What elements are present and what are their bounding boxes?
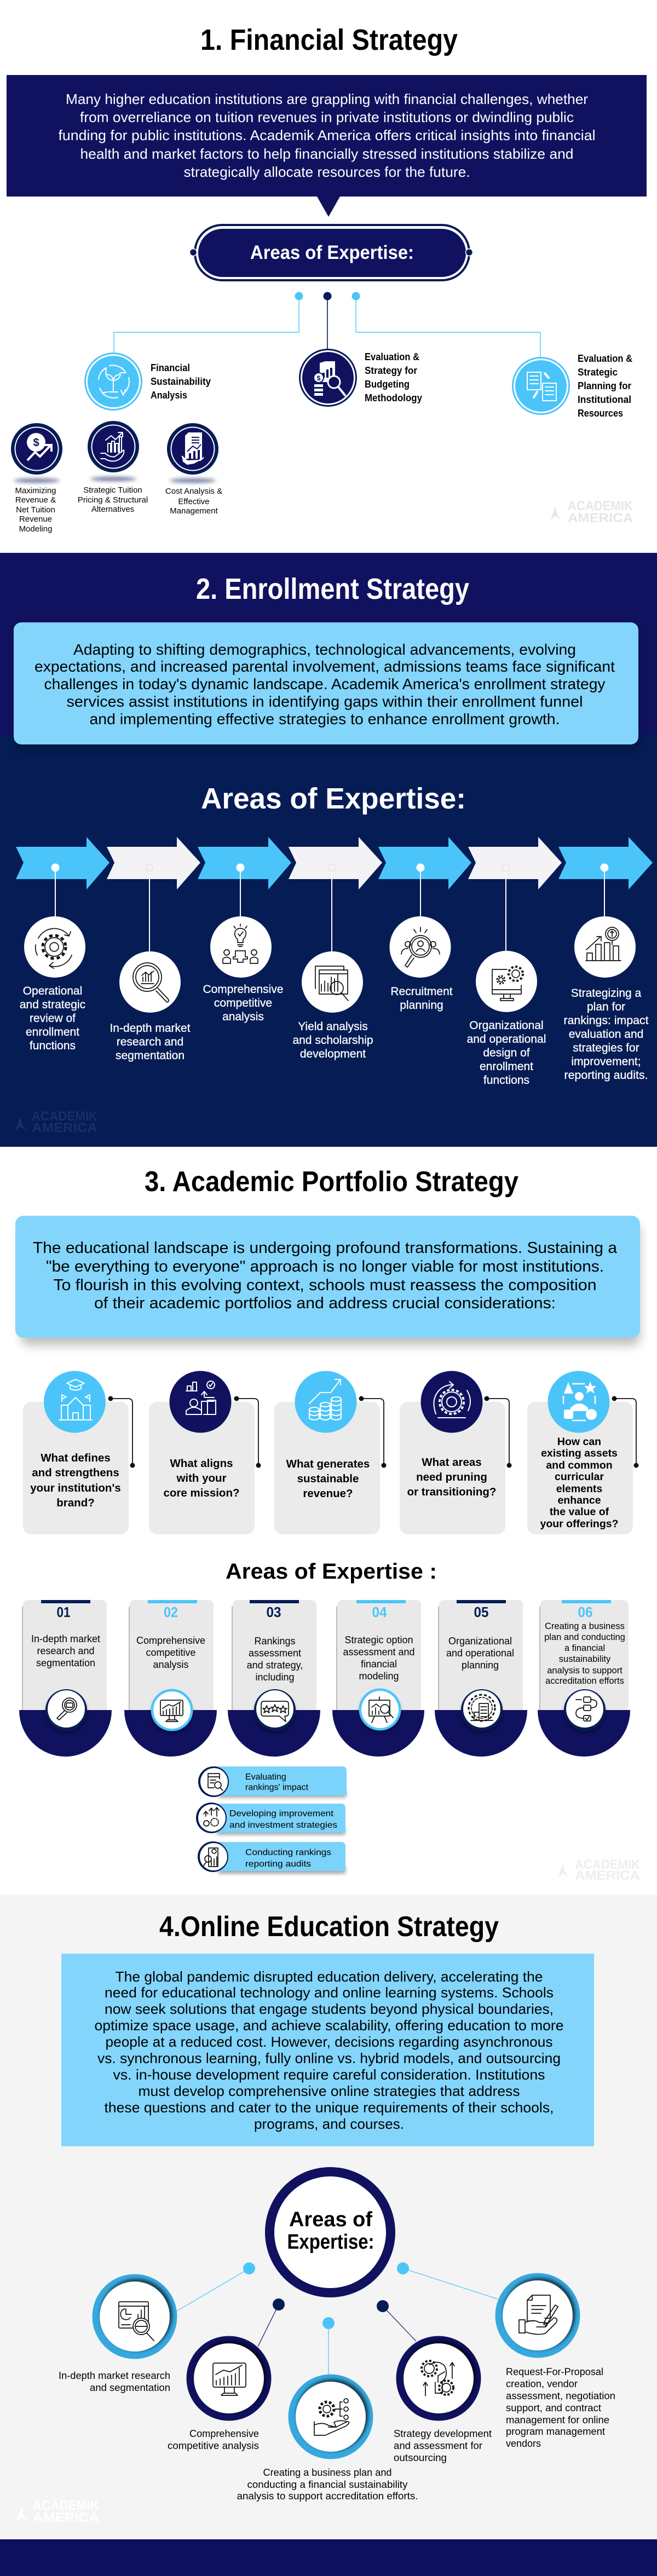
label: financial sustainability analysis: Analysis	[151, 389, 187, 401]
spoke: request for proposal	[495, 2273, 615, 2449]
step 6: organizational design	[467, 951, 546, 1087]
label: institutional resources: Institutional	[578, 394, 631, 405]
step 3: competitive analysis	[203, 916, 284, 1023]
step 4: yield analysis: and scholarship	[292, 1034, 373, 1047]
step 7: rankings plan: plan for	[587, 1001, 625, 1013]
card: assets and curricular elements: the value of	[550, 1506, 609, 1518]
label: budgeting methodology: Evaluation &	[365, 351, 419, 362]
heading: areas of expertise (enrollment): Areas of Expertise:	[201, 782, 466, 815]
spoke: request for proposal: Request-For-Proposal	[506, 2366, 603, 2377]
watermark: top: AMERICA	[568, 511, 633, 525]
column 04: strategic option assessment: 04	[372, 1604, 387, 1620]
title: 4.Online Education Strategy: 4.Online Education Strategy	[159, 1911, 499, 1943]
panel: enrollment intro: Adapting to shifting demographics, technological advancements, evolving	[73, 641, 576, 658]
label: budgeting methodology: Budgeting	[365, 378, 410, 390]
spoke: market research: In-depth market research	[59, 2370, 170, 2381]
step 5: recruitment planning: planning	[400, 999, 443, 1012]
label: financial sustainability analysis: Financial	[151, 362, 190, 373]
card: pruning or transitioning: or transitioning?	[407, 1486, 496, 1498]
column 03: rankings assessment: Rankings	[254, 1636, 296, 1647]
spoke: market research	[59, 2274, 177, 2393]
column 01: market research: In-depth market	[31, 1633, 100, 1644]
icon: maximizing revenue	[11, 423, 62, 483]
watermark: enrollment: AMERICA	[32, 1120, 97, 1135]
card: sustainable revenue: revenue?	[303, 1487, 353, 1500]
label: institutional resources: Resources	[578, 407, 623, 419]
icon: cost analysis	[167, 423, 218, 483]
label: maximizing revenue: Modeling	[19, 524, 52, 534]
column 01: market research: segmentation	[36, 1657, 95, 1668]
step 3: competitive analysis: Comprehensive	[203, 983, 284, 996]
column 03: rankings assessment	[228, 1600, 320, 1757]
icon: maximizing revenue: $	[33, 437, 39, 449]
column 05: organizational planning: and operational	[446, 1648, 514, 1659]
footer band	[0, 2539, 657, 2576]
hub: areas of expertise circle	[265, 2167, 395, 2297]
spoke: request for proposal: assessment, negotiation	[506, 2390, 615, 2401]
areas of expertise pill: Areas of Expertise:	[250, 242, 414, 263]
column 05: organizational planning: Organizational	[448, 1636, 512, 1647]
watermark: online: ACADEMIK	[33, 2498, 100, 2513]
section background: online education strategy	[0, 1895, 657, 2539]
card: institution's brand: brand?	[56, 1497, 95, 1509]
spoke: market research: and segmentation	[90, 2382, 170, 2393]
panel: enrollment intro: services assist institutions in identifying gaps within their enrollment funnel	[67, 693, 583, 710]
label: cost analysis: Effective	[178, 497, 210, 506]
spoke: business plan: conducting a financial sustainability	[247, 2479, 408, 2490]
panel: academic portfolio intro: of their academic portfolios and address crucial considerations:	[94, 1295, 556, 1312]
column 06: business plan	[538, 1600, 630, 1757]
step 4: yield analysis	[292, 951, 373, 1060]
step 2: market research: research and	[117, 1036, 183, 1048]
panel: financial strategy intro: funding for public institutions. Academik America offers critical insights into financial	[58, 127, 596, 143]
label: maximizing revenue: Net Tuition	[16, 505, 55, 515]
panel: online education intro: these questions and cater to the unique requirements of their schools,	[104, 2099, 554, 2116]
step 1: operational review: functions	[30, 1039, 76, 1052]
card: institution's brand	[23, 1371, 135, 1534]
panel: online education intro: need for educational technology and online learning systems. Schools	[105, 1984, 554, 2001]
spoke: business plan: analysis to support accreditation efforts.	[237, 2490, 418, 2502]
panel: financial strategy intro: from overreliance on tuition revenues in private institutions or dwindling public	[80, 109, 574, 125]
watermark: online: AMERICA	[33, 2510, 99, 2525]
step 4: yield analysis: Yield analysis	[298, 1020, 368, 1033]
panel: financial strategy intro: strategically allocate resources for the future.	[184, 164, 470, 180]
step 6: organizational design: Organizational	[469, 1019, 544, 1032]
card: assets and curricular elements: existing assets	[541, 1447, 618, 1459]
spoke: request for proposal: creation, vendor	[506, 2378, 578, 2389]
step 7: rankings plan	[564, 916, 649, 1082]
sub-item: conducting rankings reporting audits: Conducting rankings	[245, 1848, 331, 1857]
card: assets and curricular elements: elements	[556, 1483, 602, 1495]
spoke: strategy development: outsourcing	[394, 2452, 447, 2463]
sub-item: evaluating rankings impact: rankings' impact	[245, 1783, 309, 1792]
areas of expertise pill	[189, 225, 473, 280]
panel: academic portfolio intro: The educational landscape is undergoing profound transformations. Sustaining a	[33, 1239, 618, 1257]
column 06: business plan: analysis to support	[547, 1666, 623, 1676]
step 6: organizational design: design of	[483, 1047, 530, 1059]
sub-item: conducting rankings reporting audits	[198, 1841, 345, 1874]
spoke: strategy development	[394, 2336, 492, 2463]
section background: enrollment strategy	[0, 553, 657, 1147]
column 06: business plan: Creating a business	[545, 1621, 625, 1631]
watermark: portfolio	[558, 1857, 641, 1883]
column 01: market research	[19, 1600, 112, 1757]
watermark: enrollment	[15, 1109, 98, 1135]
sub-item: developing improvement strategies: Developing improvement	[229, 1809, 334, 1818]
card: core mission: What aligns	[170, 1457, 233, 1470]
column 06: business plan: plan and conducting	[544, 1632, 625, 1642]
hub: areas of expertise circle: Expertise:	[287, 2231, 374, 2254]
column 03: rankings assessment: assessment	[249, 1648, 301, 1659]
step 5: recruitment planning: Recruitment	[390, 985, 453, 998]
card: core mission	[149, 1371, 261, 1534]
card: pruning or transitioning: What areas	[422, 1456, 482, 1469]
sub-item: developing improvement strategies	[196, 1803, 345, 1835]
icon: financial sustainability	[84, 353, 142, 411]
step 7: rankings plan: evaluation and	[569, 1028, 643, 1041]
column 03: rankings assessment: and strategy,	[247, 1660, 303, 1671]
column 05: organizational planning	[435, 1600, 527, 1757]
panel: academic portfolio intro: To flourish in this evolving context, schools must reassess the composition	[54, 1277, 597, 1294]
label: maximizing revenue: Revenue &	[15, 495, 56, 505]
watermark: top	[551, 499, 633, 525]
label: maximizing revenue	[15, 486, 56, 534]
panel: online education intro: must develop comprehensive online strategies that address	[138, 2083, 520, 2099]
watermark: top: ACADEMIK	[568, 499, 633, 513]
step 1: operational review: and strategic	[20, 998, 85, 1011]
panel: enrollment intro: challenges in today's dynamic landscape. Academik America's enrollment strategy	[44, 675, 606, 692]
column 06: business plan: sustainability	[559, 1654, 611, 1664]
connectors: pill to three areas	[114, 292, 540, 357]
column 04: strategic option assessment	[332, 1600, 424, 1757]
panel: enrollment intro: expectations, and increased parental involvement, admissions teams face significant	[34, 658, 615, 675]
connectors: hub to spokes	[177, 2262, 498, 2375]
step 6: organizational design: enrollment	[480, 1060, 533, 1073]
panel: online education intro: programs, and courses.	[254, 2116, 404, 2132]
heading: areas of expertise (portfolio): Areas of Expertise :	[226, 1560, 437, 1584]
sub-item: developing improvement strategies: and investment strategies	[229, 1821, 337, 1830]
spoke: competitive analysis: competitive analysis	[168, 2440, 259, 2451]
column 03: rankings assessment: including	[255, 1672, 295, 1683]
card: sustainable revenue	[274, 1371, 387, 1534]
panel: academic portfolio intro	[15, 1216, 640, 1345]
column 01: market research: 01	[57, 1604, 70, 1620]
label: institutional resources	[578, 353, 632, 419]
label: budgeting methodology: Strategy for	[365, 365, 417, 376]
spoke: business plan: Creating a business plan and	[263, 2467, 392, 2478]
label: maximizing revenue: Revenue	[19, 515, 52, 524]
watermark: portfolio: ACADEMIK	[575, 1857, 641, 1872]
card: assets and curricular elements: How can	[557, 1436, 601, 1448]
label: institutional resources: Strategic	[578, 366, 618, 378]
label: cost analysis: Management	[170, 506, 218, 516]
panel: online education intro: vs. in-house development require careful consideration. Institutions	[113, 2066, 545, 2083]
step 6: organizational design: functions	[483, 1074, 529, 1087]
label: cost analysis: Cost Analysis &	[165, 487, 222, 496]
column 02: competitive analysis: 02	[164, 1604, 178, 1620]
card: core mission: core mission?	[163, 1487, 240, 1499]
card: institution's brand: What defines	[41, 1452, 111, 1464]
sub-item: evaluating rankings impact	[198, 1766, 347, 1798]
label: financial sustainability analysis	[151, 362, 211, 401]
label: strategic tuition pricing: Alternatives	[91, 505, 134, 514]
step 3: competitive analysis: analysis	[222, 1010, 264, 1023]
card: assets and curricular elements: and common	[546, 1459, 613, 1471]
panel: academic portfolio intro: "be everything to everyone" approach is no longer viable for most institutions.	[46, 1258, 604, 1275]
step 4: yield analysis: development	[300, 1048, 366, 1060]
label: institutional resources: Evaluation &	[578, 353, 632, 364]
section background: financial strategy	[0, 0, 657, 553]
panel: online education intro: The global pandemic disrupted education delivery, accelerating the	[115, 1968, 543, 1985]
column 06: business plan: 06	[578, 1604, 592, 1620]
column 02: competitive analysis: competitive	[146, 1647, 196, 1658]
step 7: rankings plan: improvement;	[571, 1055, 641, 1068]
column 01: market research: research and	[37, 1645, 95, 1656]
step 1: operational review: review of	[30, 1012, 76, 1025]
step 7: rankings plan: Strategizing a	[571, 987, 642, 1000]
column 04: strategic option assessment: assessment and	[343, 1647, 415, 1657]
card: core mission: with your	[176, 1472, 227, 1485]
card: sustainable revenue: sustainable	[297, 1472, 359, 1485]
hub: areas of expertise circle: Areas of	[289, 2208, 372, 2231]
spoke: request for proposal: management for online	[506, 2414, 609, 2425]
column 05: organizational planning: 05	[474, 1604, 488, 1620]
panel: enrollment intro	[14, 622, 638, 751]
card: assets and curricular elements: your offerings?	[540, 1518, 619, 1530]
column 04: strategic option assessment: financial	[361, 1659, 397, 1670]
sub-item: evaluating rankings impact: Evaluating	[245, 1772, 286, 1782]
chevron arrows row	[16, 837, 653, 890]
column 02: competitive analysis: analysis	[153, 1659, 189, 1670]
column 05: organizational planning: planning	[462, 1660, 499, 1671]
card: institution's brand: your institution's	[30, 1482, 121, 1494]
title: 3. Academic Portfolio Strategy: 3. Academic Portfolio Strategy	[145, 1166, 518, 1198]
card: sustainable revenue: What generates	[286, 1458, 370, 1470]
step 2: market research: segmentation	[116, 1049, 185, 1062]
spoke: request for proposal: vendors	[506, 2438, 541, 2449]
spoke: request for proposal: program management	[506, 2425, 605, 2437]
column 04: strategic option assessment: Strategic option	[344, 1634, 413, 1645]
column 04: strategic option assessment: modeling	[359, 1671, 399, 1682]
column 06: business plan: a financial	[564, 1643, 605, 1653]
panel: financial strategy intro: Many higher education institutions are grappling with financial challenges, whether	[66, 91, 588, 107]
spoke: request for proposal: support, and contract	[506, 2402, 601, 2413]
label: strategic tuition pricing: Strategic Tuition	[83, 486, 142, 495]
step 2: market research	[110, 951, 191, 1062]
column 06: business plan: accreditation efforts	[545, 1676, 624, 1686]
step 1: operational review	[20, 916, 85, 1052]
spoke: business plan	[237, 2375, 418, 2502]
card: pruning or transitioning: need pruning	[416, 1471, 487, 1483]
column 02: competitive analysis: Comprehensive	[136, 1635, 205, 1646]
watermark: online	[16, 2498, 100, 2525]
step 7: rankings plan: rankings: impact	[564, 1014, 649, 1027]
label: strategic tuition pricing: Pricing & Structural	[78, 495, 148, 505]
spoke: strategy development: Strategy development	[394, 2428, 492, 2439]
sub-item: conducting rankings reporting audits: reporting audits	[245, 1859, 311, 1869]
icon: budgeting methodology: $	[317, 374, 321, 382]
card: institution's brand: and strengthens	[32, 1466, 119, 1479]
label: financial sustainability analysis: Sustainability	[151, 376, 211, 387]
label: budgeting methodology	[365, 351, 423, 403]
watermark: portfolio: AMERICA	[575, 1868, 640, 1883]
step 7: rankings plan: strategies for	[573, 1042, 639, 1054]
icon: strategic tuition pricing	[88, 421, 139, 481]
card: assets and curricular elements: enhance	[557, 1494, 601, 1506]
connector lines from arrows to icons	[51, 864, 608, 955]
panel: enrollment intro: and implementing effective strategies to enhance enrollment growth.	[90, 711, 560, 727]
title: 2. Enrollment Strategy: 2. Enrollment Strategy	[196, 573, 469, 605]
spoke: strategy development: and assessment for	[394, 2440, 482, 2451]
label: cost analysis	[165, 487, 222, 516]
panel: online education intro: vs. synchronous learning, fully online vs. hybrid models, and outsourcing	[97, 2050, 561, 2066]
panel: online education intro: now seek solutions that engage students beyond physical boundaries,	[105, 2001, 554, 2017]
icon: institutional resources planning	[512, 357, 570, 415]
title: 1. Financial Strategy: 1. Financial Strategy	[200, 24, 458, 56]
step 6: organizational design: and operational	[467, 1033, 546, 1046]
label: strategic tuition pricing	[78, 486, 148, 514]
label: maximizing revenue: Maximizing	[15, 486, 56, 495]
column 03: rankings assessment: 03	[266, 1604, 281, 1620]
label: budgeting methodology: Methodology	[365, 392, 423, 403]
spoke: competitive analysis: Comprehensive	[189, 2428, 259, 2439]
label: institutional resources: Planning for	[578, 380, 631, 391]
panel: online education intro	[61, 1954, 594, 2146]
card: assets and curricular elements: curricular	[555, 1471, 604, 1483]
spoke: competitive analysis	[168, 2336, 272, 2451]
step 3: competitive analysis: competitive	[214, 997, 272, 1009]
step 2: market research: In-depth market	[110, 1022, 191, 1035]
panel: financial strategy intro	[7, 75, 647, 217]
step 7: rankings plan: reporting audits.	[564, 1069, 648, 1082]
card: pruning or transitioning	[400, 1371, 511, 1534]
step 5: recruitment planning	[390, 916, 453, 1012]
column 02: competitive analysis	[124, 1600, 217, 1757]
watermark: enrollment: ACADEMIK	[32, 1109, 98, 1124]
icon: budgeting methodology	[299, 349, 357, 407]
card: assets and curricular elements	[527, 1371, 638, 1534]
panel: financial strategy intro: health and market factors to help financially stressed institutions stabilize and	[80, 146, 574, 162]
step 1: operational review: enrollment	[26, 1026, 79, 1038]
panel: online education intro: optimize space usage, and achieve scalability, offering education to more	[94, 2017, 564, 2034]
panel: online education intro: people at a reduced cost. However, decisions regarding asynchronous	[105, 2034, 552, 2050]
step 1: operational review: Operational	[23, 985, 82, 997]
